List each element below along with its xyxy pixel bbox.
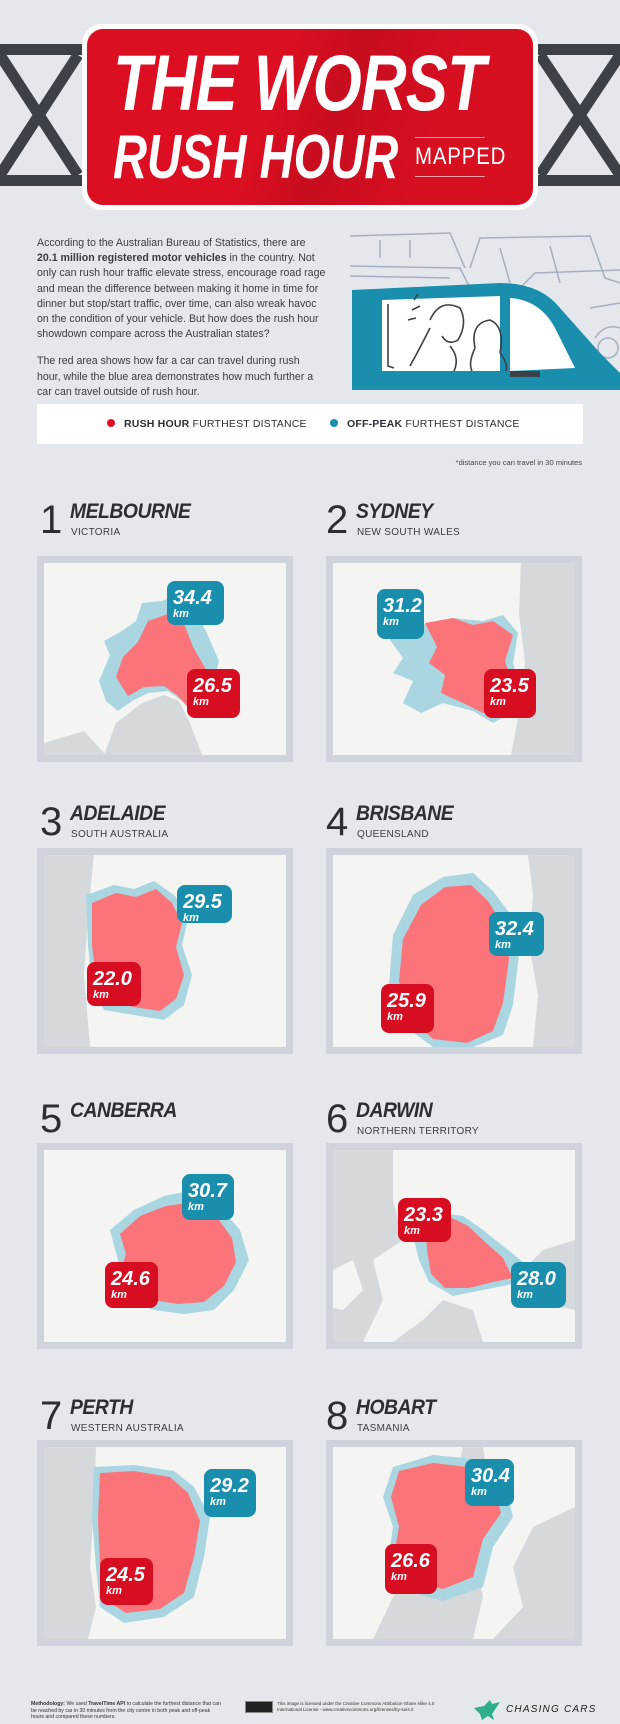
label: adelaide off-peak 29.5: km: [183, 912, 199, 924]
label: sydney rush 23.5: 23.5: [490, 675, 529, 697]
label: sydney rush 23.5: km: [490, 696, 506, 708]
heading: sydney: SYDNEY: [356, 500, 433, 523]
footer: methodology: Methodology: We used TravelTime API to calculate the furthest distance that can be reached by car in 30 minutes from the city centre in both peak and off-peak hours and compared these numbers.: [31, 1701, 221, 1720]
label: hobart off-peak 30.4: 30.4: [471, 1465, 510, 1487]
label: brisbane off-peak 32.4: km: [495, 939, 511, 951]
title text: THE WORST: [113, 38, 485, 127]
label: adelaide rush 22.0: km: [93, 989, 109, 1001]
label: perth rush 24.5: [100, 1558, 153, 1605]
heading: adelaide: ADELAIDE: [70, 802, 165, 825]
heading: hobart: 8: [326, 1394, 348, 1438]
intro text: on the condition of your vehicle. But how does the rush hour: [37, 313, 318, 325]
heading: brisbane: [326, 800, 454, 844]
label: melbourne rush 26.5: km: [193, 696, 209, 708]
footnote: *distance you can travel in 30 minutes: [456, 458, 582, 467]
label: melbourne off-peak 34.4: km: [173, 608, 189, 620]
label: canberra rush 24.6: km: [111, 1289, 127, 1301]
heading: sydney: 2: [326, 498, 348, 542]
heading: adelaide: 3: [40, 800, 62, 844]
label: adelaide off-peak 29.5: 29.5: [183, 891, 222, 913]
label: adelaide off-peak 29.5: [177, 885, 232, 923]
heading: perth: 7: [40, 1394, 62, 1438]
label: melbourne off-peak 34.4: [167, 581, 224, 625]
label: melbourne off-peak 34.4: 34.4: [173, 587, 212, 609]
subtitle: mapped: [415, 137, 485, 177]
heading: perth: [40, 1394, 184, 1438]
intro text: only can rush hour traffic elevate stress, encourage road rage: [37, 267, 325, 279]
label: perth off-peak 29.2: km: [210, 1496, 226, 1508]
footer: licence: This image is licensed under the Creative Commons Attribution-Share Alike 4.0 International License - www.creativecommons.org/licenses/by-sa/4.0: [277, 1701, 434, 1712]
label: perth rush 24.5: 24.5: [106, 1564, 145, 1586]
label: darwin off-peak 28.0: km: [517, 1289, 533, 1301]
label: darwin rush 23.3: km: [404, 1225, 420, 1237]
label: sydney off-peak 31.2: [377, 589, 424, 639]
heading: darwin: DARWIN: [356, 1099, 432, 1122]
label: canberra off-peak 30.7: [182, 1174, 234, 1220]
heading: canberra: CANBERRA: [70, 1099, 177, 1122]
label: darwin off-peak 28.0: [511, 1262, 566, 1308]
heading: hobart: [326, 1394, 438, 1438]
footer: chasing cars logo: CHASING CARS: [506, 1704, 597, 1715]
label: hobart rush 26.6: km: [391, 1571, 407, 1583]
label: darwin rush 23.3: 23.3: [404, 1204, 443, 1226]
intro text: car can travel outside of rush hour.: [37, 386, 200, 398]
panel: canberra map: [37, 1143, 293, 1349]
label: brisbane off-peak 32.4: [489, 912, 544, 956]
label: hobart rush 26.6: [385, 1544, 437, 1594]
intro text: [37, 237, 325, 398]
label: brisbane rush 25.9: [381, 984, 434, 1033]
intro text: The red area shows how far a car can travel during rush: [37, 355, 300, 367]
heading: hobart: HOBART: [356, 1396, 436, 1419]
panel: perth map: [37, 1440, 293, 1646]
label: brisbane off-peak 32.4: 32.4: [495, 918, 534, 940]
intro text: 20.1 million registered motor vehicles in the country. Not: [37, 252, 315, 264]
label: canberra off-peak 30.7: km: [188, 1201, 204, 1213]
label: darwin rush 23.3: [398, 1198, 451, 1242]
title text: RUSH HOUR: [113, 123, 398, 192]
panel: brisbane map: [326, 848, 582, 1054]
label: canberra off-peak 30.7: 30.7: [188, 1180, 227, 1202]
panel: adelaide map: [37, 848, 293, 1054]
heading: brisbane: BRISBANE: [356, 802, 453, 825]
panel: sydney map: [326, 556, 582, 762]
label: melbourne rush 26.5: 26.5: [193, 675, 232, 697]
heading: brisbane: 4: [326, 800, 348, 844]
label: perth off-peak 29.2: 29.2: [210, 1475, 249, 1497]
label: adelaide rush 22.0: [87, 962, 141, 1006]
label: sydney off-peak 31.2: km: [383, 616, 399, 628]
heading: sydney: NEW SOUTH WALES: [357, 527, 460, 538]
label: adelaide rush 22.0: 22.0: [93, 968, 132, 990]
heading: adelaide: SOUTH AUSTRALIA: [71, 829, 168, 840]
panel: melbourne map: [37, 556, 293, 762]
intro text: showdown compare across the Australian states?: [37, 328, 270, 340]
label: canberra rush 24.6: 24.6: [111, 1268, 150, 1290]
heading: melbourne: 1: [40, 498, 62, 542]
label: perth off-peak 29.2: [204, 1469, 256, 1517]
car illustration: [350, 232, 620, 390]
label: darwin off-peak 28.0: 28.0: [517, 1268, 556, 1290]
heading: hobart: TASMANIA: [357, 1423, 410, 1434]
subtitle: mapped: MAPPED: [415, 143, 506, 170]
legend item: off-peak: OFF-PEAK FURTHEST DISTANCE: [347, 418, 520, 430]
label: canberra rush 24.6: [105, 1262, 158, 1308]
heading: darwin: 6: [326, 1097, 348, 1141]
label: melbourne rush 26.5: [187, 669, 240, 718]
heading: brisbane: QUEENSLAND: [357, 829, 429, 840]
panel: darwin map: [326, 1143, 582, 1349]
label: hobart rush 26.6: 26.6: [391, 1550, 430, 1572]
heading: darwin: NORTHERN TERRITORY: [357, 1126, 479, 1137]
label: brisbane rush 25.9: km: [387, 1011, 403, 1023]
heading: darwin: [326, 1097, 479, 1141]
label: sydney rush 23.5: [484, 669, 536, 718]
label: perth rush 24.5: km: [106, 1585, 122, 1597]
heading: adelaide: [40, 800, 168, 844]
heading: perth: PERTH: [70, 1396, 133, 1419]
label: hobart off-peak 30.4: [465, 1459, 514, 1506]
legend: [37, 404, 583, 444]
intro text: hour, while the blue area demonstrates how much further a: [37, 371, 313, 383]
heading: perth: WESTERN AUSTRALIA: [71, 1423, 184, 1434]
heading: canberra: [40, 1097, 177, 1141]
heading: canberra: 5: [40, 1097, 62, 1141]
heading: melbourne: [40, 498, 192, 542]
title banner: [82, 24, 538, 210]
intro text: According to the Australian Bureau of Statistics, there are: [37, 237, 306, 249]
panel: hobart map: [326, 1440, 582, 1646]
title text: [113, 38, 506, 192]
header girders: [0, 44, 620, 186]
footer: chasing cars logo: [474, 1700, 597, 1720]
heading: sydney: [326, 498, 460, 542]
heading: melbourne: VICTORIA: [71, 527, 120, 538]
heading: melbourne: MELBOURNE: [70, 500, 190, 523]
label: sydney off-peak 31.2: 31.2: [383, 595, 422, 617]
legend item: rush hour: RUSH HOUR FURTHEST DISTANCE: [124, 418, 307, 430]
label: brisbane rush 25.9: 25.9: [387, 990, 426, 1012]
intro text: dinner but stop/start traffic, over time, can also wreak havoc: [37, 298, 316, 310]
intro text: and mean the difference between making it home in time for: [37, 283, 318, 295]
label: hobart off-peak 30.4: km: [471, 1486, 487, 1498]
